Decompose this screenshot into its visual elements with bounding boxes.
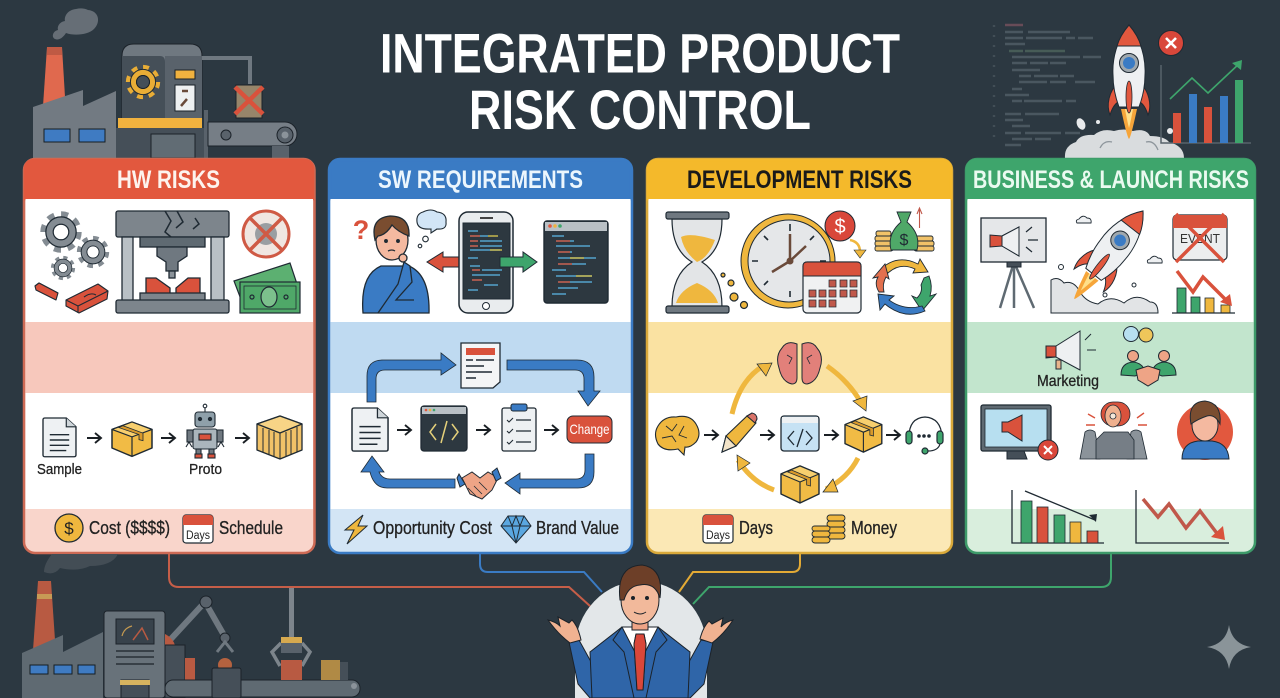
icon: dollar coin with arrow [825, 211, 866, 258]
right hand [700, 618, 733, 643]
presenter with open hands [548, 565, 733, 698]
icon: cancelled event calendar: EVENT [1180, 231, 1220, 246]
icon: calendar [803, 262, 861, 313]
icon: red x badge [1158, 30, 1184, 56]
icon: sparkle watermark [1207, 625, 1251, 669]
icon: cracked press [116, 211, 229, 313]
icon: handshake [457, 468, 501, 499]
legend: opportunity cost and brand value: Opportunity Cost [373, 518, 492, 538]
icon: smartphone with code [459, 212, 513, 313]
icon: question mark: ? [353, 215, 369, 245]
icon: cancelled event calendar [1173, 214, 1227, 262]
icon: robot [186, 404, 224, 458]
label: Change: Change [570, 421, 610, 437]
change cycle flow [656, 343, 943, 503]
heading: HW RISKS: HW RISKS [117, 166, 220, 194]
icon: speaker to crowd [1080, 402, 1147, 459]
head [619, 565, 661, 630]
illustration: top-right rocket launch with code and chart [994, 25, 1251, 158]
heading: SW REQUIREMENTS: SW REQUIREMENTS [378, 166, 583, 194]
icon: partners handshake [1121, 326, 1176, 386]
icon: coin: $ [64, 519, 74, 538]
chart: falling trend line [1136, 490, 1229, 543]
legend: cost and schedule [55, 514, 283, 543]
icon: money bag and coins [875, 208, 934, 251]
icon: prohibited part [243, 211, 289, 257]
title [380, 22, 900, 141]
icon: pink brain [778, 343, 821, 384]
panel: development risks [647, 159, 952, 553]
icon: code window [544, 221, 608, 303]
illustration: top-left factory [33, 8, 297, 158]
title: RISK CONTROL [469, 78, 811, 141]
icon: days calendar [703, 515, 733, 543]
label: Proto: Proto [189, 461, 222, 478]
panel: HW risks [24, 159, 314, 553]
heading: DEVELOPMENT RISKS: DEVELOPMENT RISKS [687, 166, 912, 194]
icon: money bag and coins: $ [900, 232, 909, 249]
icon: megaphone [1046, 331, 1096, 370]
label: Change [567, 416, 612, 443]
loop arrows [732, 366, 863, 490]
icon: cycle arrows [873, 259, 936, 314]
icon: code editor [421, 406, 467, 451]
label: Sample: Sample [37, 461, 82, 478]
icon: presentation board with megaphone [981, 218, 1046, 308]
legend: opportunity cost and brand value [345, 515, 619, 544]
faint code lines [994, 25, 1101, 145]
icon: requirements document [461, 343, 500, 388]
illustration: bottom-left factory line [22, 554, 360, 698]
icon: coin [55, 514, 83, 542]
icon: falling bar chart [1172, 271, 1235, 313]
icon: brain yellow [656, 416, 699, 455]
icon: clock [741, 214, 835, 308]
icon: thinking person [363, 216, 429, 313]
icon: lightning bolt [345, 515, 367, 544]
legend: days and money: Money [851, 518, 897, 538]
icon: broken bricks [35, 283, 108, 313]
backdrop circle [575, 581, 707, 698]
icon: code window [781, 416, 819, 451]
panel: SW requirements [329, 159, 632, 553]
title: INTEGRATED PRODUCT [380, 22, 900, 84]
label: Marketing: Marketing [1037, 373, 1099, 390]
icon: hourglass [666, 212, 748, 313]
rising bar chart [1161, 60, 1251, 143]
icon: arrow right green [500, 252, 537, 272]
icon: money [234, 263, 300, 313]
arms and suit [569, 627, 713, 698]
loop arrows [361, 353, 600, 494]
legend: opportunity cost and brand value: Brand Value [536, 518, 619, 538]
chart: falling bars [1012, 490, 1104, 543]
icon: headset [906, 417, 943, 454]
connector lines to presenter [169, 554, 1111, 606]
legend: days and money: Days [739, 518, 773, 538]
icon: launching rocket [1051, 198, 1162, 313]
icon: thought bubble [417, 210, 446, 248]
icon: crate [257, 416, 302, 459]
icon: days calendar: Days [186, 530, 210, 542]
icon: gears [43, 214, 107, 278]
panel: business and launch risks [966, 159, 1255, 553]
icon: person on red circle [1177, 401, 1233, 460]
left hand [548, 617, 581, 643]
icon: pencil [722, 413, 757, 452]
legend: cost and schedule: Cost ($$$$) [89, 518, 170, 538]
process flow: sample to production [37, 404, 302, 478]
legend: days and money [703, 515, 897, 543]
icon: diamond [501, 516, 531, 543]
icon: checklist [502, 404, 536, 451]
icon: coin stacks [812, 515, 845, 543]
icon: days calendar [183, 515, 213, 543]
change cycle flow [352, 343, 612, 499]
icon: arrow left red [427, 252, 464, 272]
legend: cost and schedule: Schedule [219, 518, 283, 538]
icon: days calendar: Days [706, 530, 730, 542]
icon: monitor ad failed [981, 405, 1058, 460]
icon: dollar coin with arrow: $ [834, 216, 846, 238]
